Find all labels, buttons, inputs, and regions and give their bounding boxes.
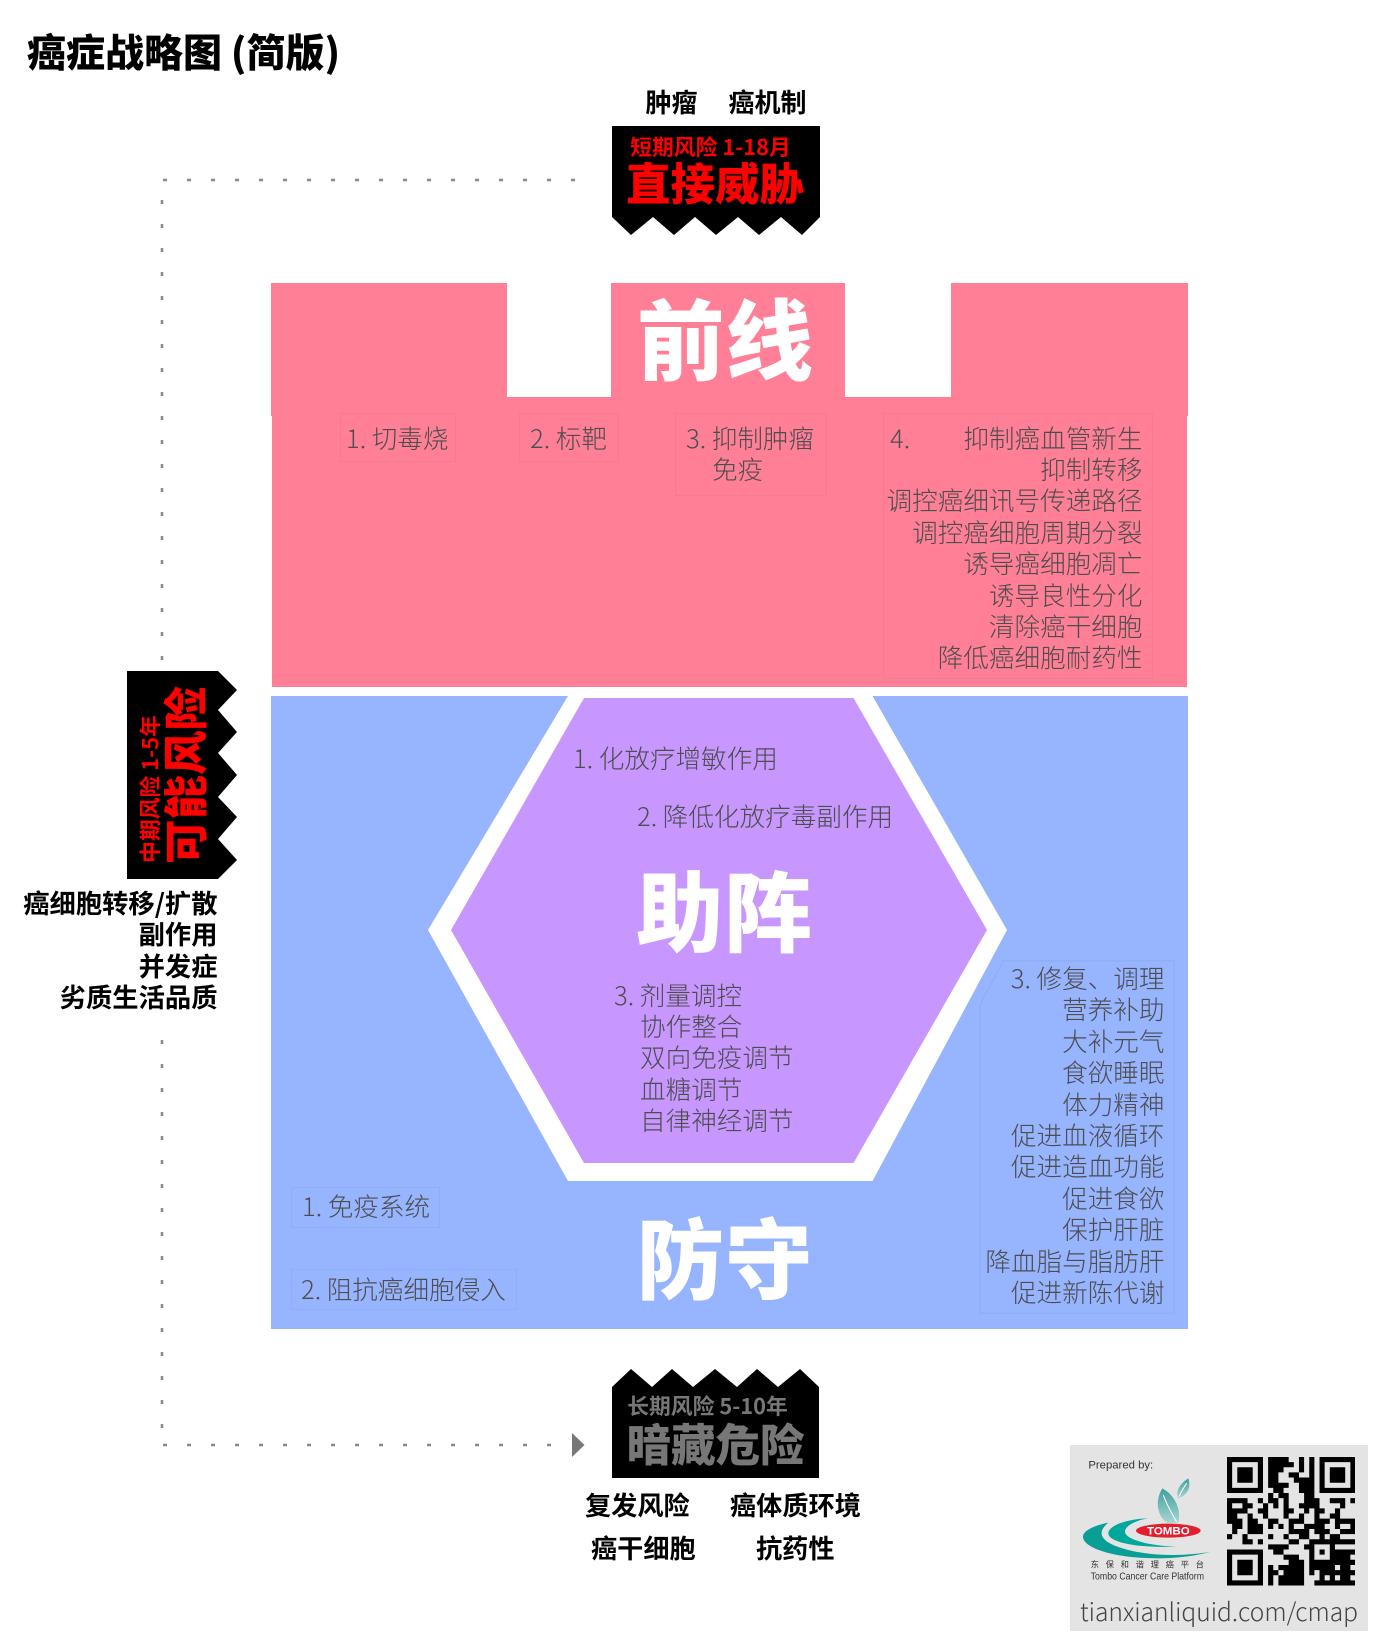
item 4: 降低癌细胞耐药性 [938,638,1142,675]
item 2: 2. 阻抗癌细胞侵入 [301,1270,506,1307]
item 3 [614,976,794,1138]
short-term labels: 癌机制 [728,83,807,120]
item 4 [883,413,1153,679]
logo: Tombo Cancer Care Platform [1091,1571,1204,1582]
item 3: 促进食欲 [1062,1179,1164,1216]
defence heading: 防守 [636,1191,814,1318]
logo: Prepared by: [1088,1460,1153,1472]
item 3: 营养补助 [1062,990,1164,1027]
item 4: 抑制转移 [1040,450,1142,487]
item 3: 3. 剂量调控 [614,976,742,1012]
item 4: 诱导癌细胞凋亡 [963,544,1142,581]
tag: short-term risk [612,126,820,235]
tag subtitle: 长期风险 5-10年 [627,1390,788,1421]
mid-term labels: 并发症 [139,945,218,984]
arrow: to long-term risk [572,1433,584,1457]
item 3: 保护肝脏 [1062,1210,1164,1247]
short-term labels [646,83,807,120]
long-term labels: 癌干细胞 [591,1528,696,1566]
logo [1082,1460,1211,1582]
long-term labels: 复发风险 [585,1484,690,1522]
item 3: 双向免疫调节 [640,1038,794,1075]
panel: support hexagon [428,696,1007,1181]
footer card [1070,1445,1368,1631]
tag heading: 暗藏危险 [626,1409,805,1474]
item 3: 自律神经调节 [640,1101,794,1138]
item 1: 1. 免疫系统 [302,1187,430,1224]
mid-term labels: 癌细胞转移/扩散 [23,882,218,921]
item 2: 2. 降低化放疗毒副作用 [637,797,893,834]
frontline heading: 前线 [637,272,814,399]
tag: long-term risk [612,1369,819,1478]
title: 癌症战略图 (简版) [27,22,340,78]
item 3: 大补元气 [1062,1022,1164,1059]
item 2: 2. 标靶 [530,418,607,456]
item 3: 降血脂与脂肪肝 [985,1242,1164,1279]
short-term labels: 肿瘤 [646,83,698,120]
support heading: 助阵 [636,844,813,971]
panel: defence [271,696,1188,1329]
item 3 [675,413,827,496]
tag heading: 可能风险 [150,686,215,864]
item 4: 4. [890,418,910,456]
tag: mid-term risk [127,671,237,879]
QR code [1227,1457,1355,1586]
item 3: 协作整合 [640,1007,742,1044]
item 4: 抑制癌血管新生 [963,418,1142,456]
item 3: 免疫 [712,450,763,487]
item 3 [979,959,1175,1314]
item 4: 调控癌细胞周期分裂 [912,513,1142,550]
item 4: 清除癌干细胞 [989,607,1142,644]
tag subtitle: 短期风险 1-18月 [630,131,791,162]
item 3: 促进造血功能 [1011,1147,1164,1184]
logo: TOMBO [1147,1526,1190,1538]
mid-term labels: 劣质生活品质 [60,976,218,1015]
long-term labels [585,1484,861,1566]
item 1: 1. 化放疗增敏作用 [573,738,778,776]
item 3: 促进新陈代谢 [1011,1273,1164,1310]
item 2 [519,413,619,462]
mid-term labels [23,882,218,1015]
long-term labels: 抗药性 [756,1528,835,1566]
logo: 东保和谐理癌平台 [1091,1558,1204,1570]
long-term labels: 癌体质环境 [730,1484,861,1522]
item 3: 食欲睡眠 [1062,1053,1164,1090]
mid-term labels: 副作用 [139,913,218,952]
tag subtitle: 中期风险 1-5年 [134,715,165,863]
item 1: 1. 切毒烧 [346,418,449,456]
item 3: 血糖调节 [640,1070,742,1107]
item 3: 3. 修复、调理 [1011,959,1164,996]
item 3: 促进血液循环 [1011,1116,1164,1153]
tag heading: 直接威胁 [626,148,804,213]
item 1 [340,413,456,462]
item 4: 诱导良性分化 [989,576,1142,613]
item 4: 调控癌细讯号传递路径 [887,481,1142,518]
panel: frontline [271,272,1188,687]
item 3: 体力精神 [1062,1085,1164,1122]
item 3: 3. 抑制肿瘤 [686,418,814,456]
